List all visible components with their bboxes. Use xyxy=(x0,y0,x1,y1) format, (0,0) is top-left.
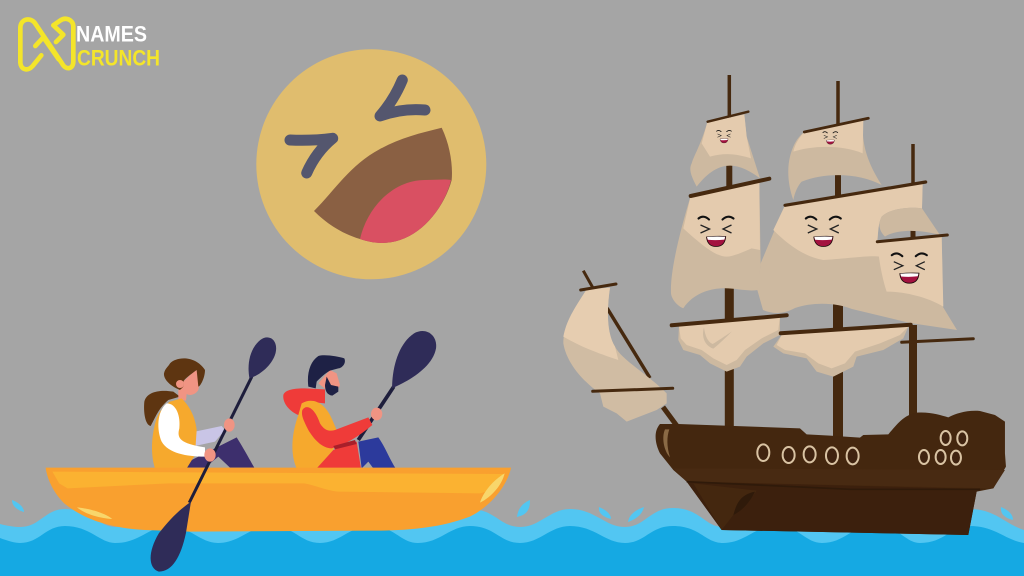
rear paddle xyxy=(358,331,436,440)
front paddle crossing hull xyxy=(151,337,276,572)
kayak with two paddlers xyxy=(46,331,511,572)
water splash droplets xyxy=(12,500,1013,522)
hull xyxy=(656,411,1006,535)
laughing emoji xyxy=(256,49,486,279)
logo text: CRUNCH: CRUNCH xyxy=(77,46,160,71)
right eye xyxy=(380,80,425,116)
mizzen upper sail xyxy=(879,208,940,237)
logo text: NAMES: NAMES xyxy=(76,22,147,47)
logo mark xyxy=(20,19,73,69)
man paddler xyxy=(283,355,396,468)
bowsprit sail xyxy=(563,288,667,422)
mainmast main sail xyxy=(757,184,957,330)
mizzen main sail xyxy=(877,236,943,307)
foremast lower sail xyxy=(678,317,780,372)
back wave xyxy=(0,508,1024,576)
mainmast sails xyxy=(757,120,957,330)
sail faces xyxy=(698,130,927,283)
left eye xyxy=(290,138,333,173)
woman's hands xyxy=(204,418,235,462)
mainmast lower sail xyxy=(773,327,908,377)
foremast top sail xyxy=(690,114,760,187)
mainmast top sail xyxy=(788,120,882,200)
masts xyxy=(583,75,913,440)
logo: Names Crunch xyxy=(20,19,160,71)
tongue xyxy=(360,180,451,243)
pirate ship xyxy=(563,75,1006,535)
mouth xyxy=(314,128,452,243)
front water xyxy=(0,526,1024,576)
foremast main sail xyxy=(671,183,761,308)
yards xyxy=(581,112,973,391)
foremast sails xyxy=(671,114,761,308)
lower sails xyxy=(678,317,908,377)
emoji face xyxy=(256,49,486,279)
portholes xyxy=(757,431,967,465)
kayak hull xyxy=(46,468,511,532)
woman paddler xyxy=(144,358,254,468)
